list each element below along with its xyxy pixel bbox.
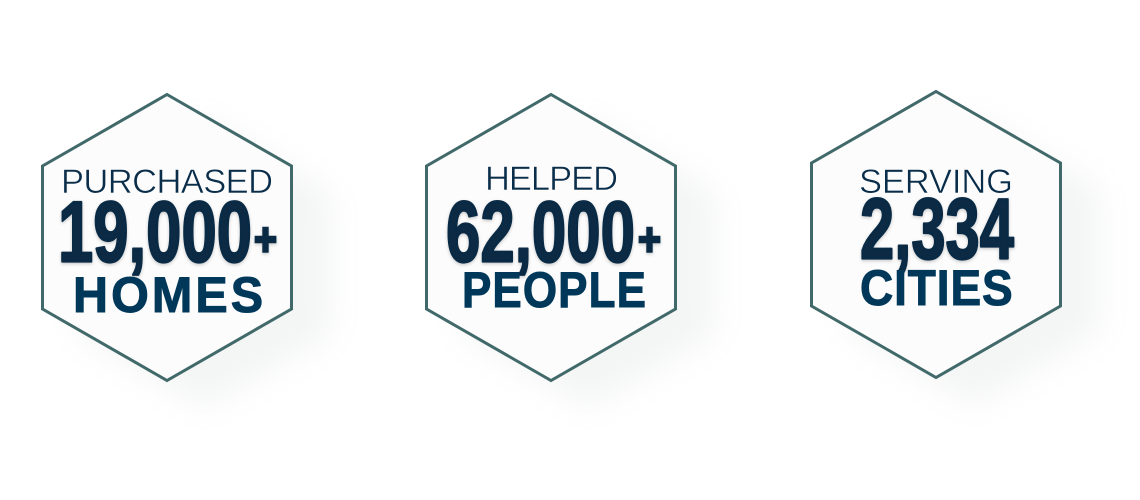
text: helped: HELPED (485, 160, 618, 198)
number: 19,000: 19,000 (58, 184, 252, 280)
panel: helped people hexagon (426, 94, 714, 407)
text: purchased: PURCHASED (61, 163, 273, 201)
panel: purchased homes hexagon (42, 94, 330, 407)
symbol: plus: + (638, 213, 661, 265)
symbol: plus: + (254, 213, 277, 265)
text: serving: SERVING (859, 163, 1013, 201)
panel: serving cities hexagon (812, 92, 1099, 404)
text: homes: HOMES (73, 267, 263, 323)
text: people: PEOPLE (462, 261, 646, 318)
number: 62,000: 62,000 (446, 184, 635, 280)
number: 2,334: 2,334 (860, 182, 1014, 278)
text: cities: CITIES (860, 261, 1013, 316)
